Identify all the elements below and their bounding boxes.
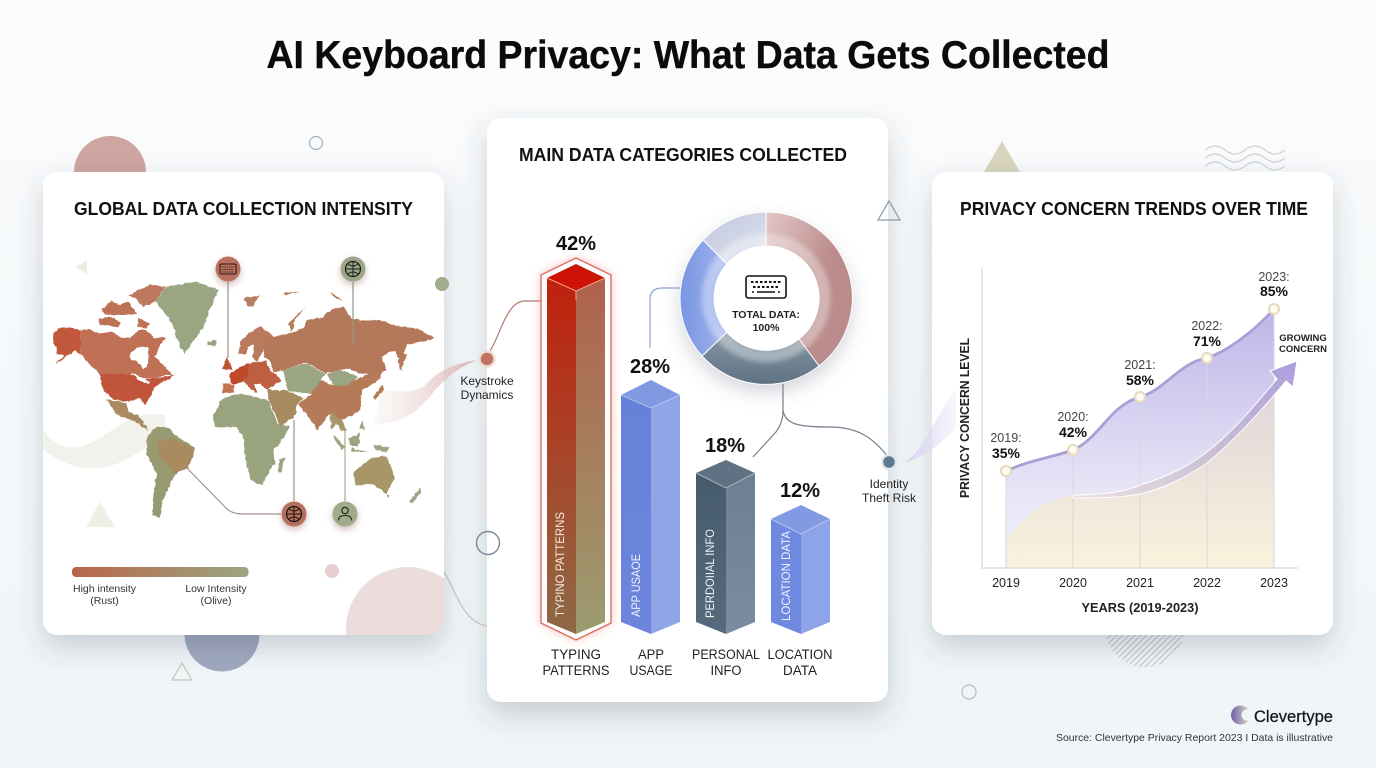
icon: globe pin rust — [282, 502, 306, 526]
data labels: 85% — [1260, 283, 1289, 299]
logo: Clevertype: Clevertype — [1254, 708, 1333, 726]
callout: keystroke dynamics — [460, 352, 514, 402]
bar category labels: APP — [638, 647, 664, 662]
legend — [72, 567, 248, 607]
panel: main data categories collected — [487, 118, 889, 702]
bar: personal info: PERDOIIAL INFO — [703, 529, 717, 618]
data labels: 2020: — [1057, 410, 1089, 424]
arrow label — [1279, 333, 1327, 355]
accents overlapping card edges — [435, 201, 900, 554]
bar category labels: INFO — [710, 663, 742, 678]
heading: PRIVACY CONCERN TRENDS OVER TIME — [960, 198, 1308, 219]
data labels: 71% — [1193, 333, 1222, 349]
bar: typing patterns — [541, 258, 611, 640]
legend: (Olive) — [201, 595, 231, 607]
icon: person pin — [332, 502, 358, 526]
data labels: 58% — [1126, 372, 1155, 388]
x axis labels: 2021 — [1126, 576, 1154, 590]
world map — [53, 282, 435, 518]
card decorations — [43, 260, 444, 635]
heading: MAIN DATA CATEGORIES COLLECTED — [519, 144, 847, 165]
ribbon: pink flow behind map — [373, 360, 478, 425]
callout: keystroke dynamics: Dynamics — [461, 388, 513, 402]
source note: Source: Clevertype Privacy Report 2023 I Data is illustrative — [1056, 732, 1333, 744]
panel: global data collection intensity — [43, 172, 478, 691]
callout: identity theft risk — [862, 455, 917, 505]
bar category labels: USAGE — [630, 663, 672, 678]
icon: keyboard — [746, 276, 786, 298]
panel: privacy concern trends over time — [905, 172, 1333, 635]
callout: identity theft risk: Theft Risk — [862, 491, 917, 505]
legend: Low Intensity — [185, 583, 247, 595]
callout: identity theft risk: Identity — [870, 477, 908, 491]
donut chart: 100% — [753, 322, 780, 334]
bar category labels: PATTERNS — [542, 663, 610, 678]
bar percentages: 42% — [556, 233, 596, 255]
bar category labels: PERSONAL — [692, 647, 760, 662]
x axis labels: 2019 — [992, 576, 1020, 590]
data labels: 2022: — [1191, 319, 1223, 333]
bar category labels: LOCATION — [768, 647, 832, 662]
bar: app usage: APP USAOE — [629, 554, 643, 617]
decorative background shapes — [74, 136, 1285, 699]
legend: (Rust) — [90, 595, 119, 607]
data labels: 2021: — [1124, 358, 1156, 372]
bar category labels: DATA — [783, 663, 817, 678]
bar percentages: 28% — [630, 356, 670, 378]
bar: typing patterns: TYPINO PATTERNS — [553, 512, 567, 617]
legend: High intensity — [73, 583, 137, 595]
bar percentages: 18% — [705, 435, 745, 457]
arrow label: CONCERN — [1279, 344, 1327, 355]
y axis title: PRIVACY CONCERN LEVEL — [958, 338, 972, 498]
bar: app usage — [621, 380, 680, 634]
line chart — [982, 268, 1298, 568]
donut chart — [680, 212, 852, 384]
data labels: 2023: — [1258, 270, 1290, 284]
data labels: 35% — [992, 445, 1021, 461]
x axis labels: 2022 — [1193, 576, 1221, 590]
bar: location data — [771, 505, 830, 634]
callout: keystroke dynamics: Keystroke — [460, 374, 514, 388]
connectors — [487, 288, 889, 458]
growth arrow — [1073, 361, 1297, 498]
logo: Clevertype — [1231, 706, 1333, 726]
x axis title: YEARS (2019-2023) — [1082, 601, 1198, 615]
donut center label: TOTAL DATA: — [732, 309, 800, 321]
data labels: 2019: — [990, 431, 1022, 445]
bar percentages — [556, 233, 820, 502]
heading: GLOBAL DATA COLLECTION INTENSITY — [74, 198, 414, 219]
x axis labels: 2020 — [1059, 576, 1087, 590]
data labels — [990, 270, 1290, 461]
data points — [1001, 304, 1279, 476]
x axis labels — [992, 576, 1288, 590]
bar: personal info — [696, 460, 755, 634]
map pin lines — [184, 282, 353, 514]
title: AI Keyboard Privacy: What Data Gets Collected — [266, 34, 1110, 77]
arrow label: GROWING — [1279, 333, 1327, 344]
ribbon: purple flow — [905, 390, 956, 462]
bar category labels: TYPING — [551, 647, 601, 662]
x axis labels: 2023 — [1260, 576, 1288, 590]
icon: keyboard pin — [216, 256, 240, 282]
bar percentages: 12% — [780, 480, 820, 502]
icon: globe pin olive — [340, 256, 366, 282]
bar category labels — [542, 647, 832, 678]
bar: location data: LOCATION DATA — [779, 531, 793, 621]
data labels: 42% — [1059, 424, 1088, 440]
